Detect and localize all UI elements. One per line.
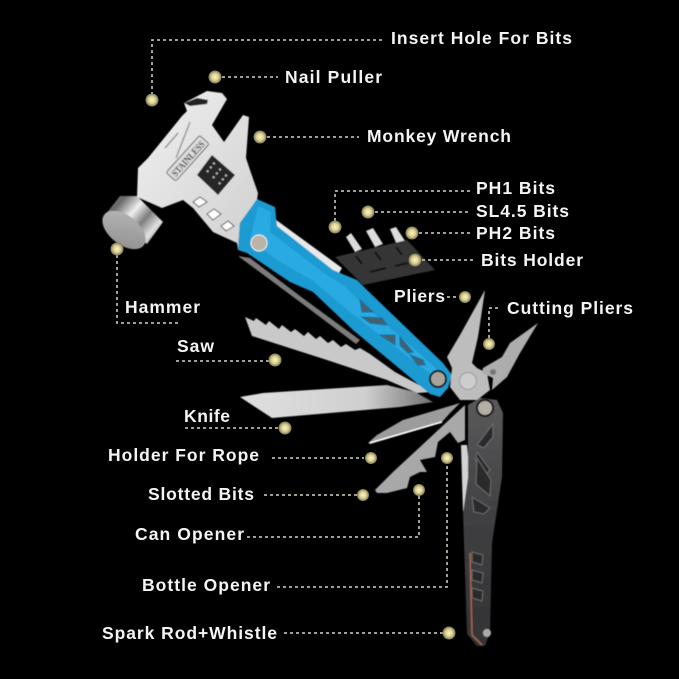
blue handle: rivet	[251, 235, 267, 251]
callout: Nail Puller: Nail Puller	[285, 67, 382, 87]
callout: Knife	[184, 406, 292, 434]
callout: Bits Holder	[408, 250, 583, 270]
callout: Monkey Wrench: Monkey Wrench	[367, 126, 511, 146]
callout: SL4.5 Bits	[362, 201, 569, 221]
callout: Holder For Rope: Holder For Rope	[108, 445, 259, 465]
callout: Bottle Opener: Bottle Opener	[142, 575, 270, 595]
callout: PH2 Bits: PH2 Bits	[476, 223, 555, 243]
callout: Saw	[176, 336, 282, 366]
tool: hammer head and monkey wrench	[137, 91, 258, 250]
tool: blue handle	[238, 199, 452, 397]
tool: saw	[245, 317, 432, 393]
tool: bits	[346, 227, 405, 252]
hammer detail: STAINLESS plate: STAINLESS	[170, 139, 208, 179]
callout: Holder For Rope	[108, 445, 377, 465]
blue handle: bottom rivet	[430, 371, 446, 387]
callout: Spark Rod+Whistle	[102, 623, 456, 643]
black handle: whistle rivet	[483, 629, 491, 637]
tool: lower plier jaw	[482, 323, 538, 390]
callout: Insert Hole For Bits	[146, 28, 572, 106]
tool: hammer face	[95, 203, 153, 257]
tool: knife	[240, 385, 433, 418]
callout: Can Opener	[135, 484, 425, 544]
black handle: spark rod	[470, 553, 482, 645]
callout: Cutting Pliers	[483, 298, 633, 350]
callout: Spark Rod+Whistle: Spark Rod+Whistle	[102, 623, 277, 643]
multi-tool illustration	[95, 91, 538, 646]
callout: Monkey Wrench	[254, 126, 511, 146]
tool: rail under blue handle	[238, 256, 360, 344]
callout: PH1 Bits	[328, 178, 555, 234]
tool: bottle opener strip	[461, 445, 472, 511]
pliers: pivot	[460, 372, 476, 390]
hammer detail: claw slots	[193, 197, 234, 231]
callout: Bottle Opener	[142, 452, 453, 595]
callout: Slotted Bits	[148, 484, 369, 504]
callout: Pliers: Pliers	[394, 286, 445, 306]
pliers: lower jaw rivet	[490, 369, 496, 375]
black handle: cut-outs	[472, 424, 493, 601]
callout: PH1 Bits: PH1 Bits	[476, 178, 555, 198]
callout: Insert Hole For Bits: Insert Hole For Bits	[391, 28, 572, 48]
hammer detail: wrench scale window	[197, 155, 235, 195]
blue handle: shading	[250, 206, 438, 380]
blue handle: cut-outs	[360, 300, 425, 365]
callout: SL4.5 Bits: SL4.5 Bits	[476, 201, 569, 221]
callout: Cutting Pliers: Cutting Pliers	[507, 298, 633, 318]
callout: Can Opener: Can Opener	[135, 524, 244, 544]
tool: blue handle white rim	[270, 216, 342, 275]
tool: hammer cylinder	[105, 196, 163, 244]
callout: Hammer: Hammer	[125, 297, 200, 317]
tool: upper plier jaw	[447, 290, 490, 400]
hammer detail: nail slot	[184, 98, 208, 106]
black handle: top rivet	[477, 400, 493, 416]
callout: Pliers	[394, 286, 471, 306]
callout: Saw: Saw	[177, 336, 214, 356]
tool: rope holder	[368, 403, 460, 444]
tool: black handle	[463, 398, 503, 646]
hammer detail: top recess	[165, 122, 190, 158]
callout: Knife: Knife	[184, 406, 230, 426]
callout: Nail Puller	[208, 67, 382, 87]
callout: Slotted Bits: Slotted Bits	[148, 484, 254, 504]
tool: bits holder	[335, 240, 435, 285]
tool: slotted bit and can opener	[375, 405, 465, 493]
callout: Hammer	[110, 242, 200, 323]
callout: Bits Holder: Bits Holder	[481, 250, 583, 270]
callout: PH2 Bits	[406, 223, 555, 243]
